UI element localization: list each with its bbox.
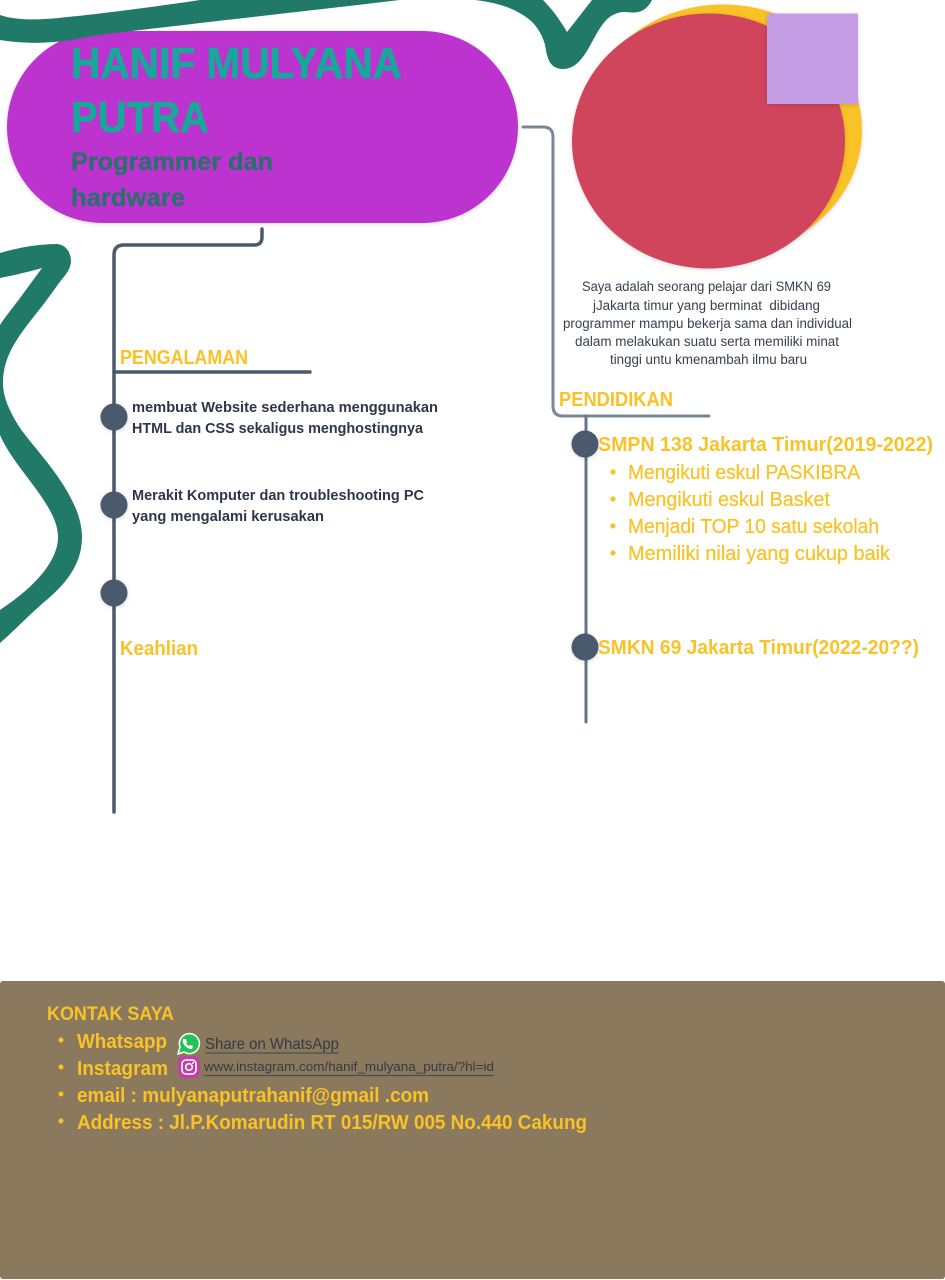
profile photo placeholder — [572, 4, 862, 268]
job title: hardware — [71, 184, 185, 212]
activities list: Mengikuti eskul PASKIBRA — [628, 462, 861, 484]
experience timeline dots — [100, 404, 128, 606]
education entry: SMKN 69: SMKN 69 Jakarta Timur(2022-20??) — [598, 637, 919, 659]
contact: address: Address : Jl.P.Komarudin RT 015/RW 005 No.440 Cakung — [77, 1112, 587, 1134]
contact heading: KONTAK SAYA — [47, 1004, 174, 1025]
experience item: website — [132, 399, 438, 437]
heading: skills: Keahlian — [120, 638, 198, 660]
experience item: website: HTML dan CSS sekaligus menghostingnya — [132, 420, 424, 437]
header pill — [7, 31, 518, 223]
job title — [71, 148, 273, 212]
contact: email: email : mulyanaputrahanif@gmail .com — [77, 1085, 429, 1107]
about me text — [563, 279, 852, 367]
education entry: SMPN 138 — [598, 434, 933, 565]
activities list — [610, 462, 891, 565]
decorative green squiggle: left — [0, 244, 82, 643]
contact: whatsapp — [58, 1031, 339, 1054]
whatsapp link: Share on WhatsApp — [205, 1036, 339, 1053]
decorative green squiggle: top — [0, 0, 652, 69]
education entry: SMPN 138: SMPN 138 Jakarta Timur(2019-2022) — [598, 434, 933, 456]
job title: Programmer dan — [71, 148, 273, 176]
connector: pill to education — [523, 127, 709, 416]
heading: experience: PENGALAMAN — [120, 347, 248, 369]
experience item: computer: Merakit Komputer dan troubleshooting PC — [132, 487, 424, 504]
icon: instagram — [178, 1056, 200, 1078]
icon: whatsapp — [178, 1034, 199, 1054]
about me text: Saya adalah seorang pelajar dari SMKN 69 — [582, 279, 831, 294]
experience item: website: membuat Website sederhana menggunakan — [132, 399, 438, 416]
heading: education: PENDIDIKAN — [559, 389, 673, 411]
education timeline line — [584, 416, 588, 722]
about me text: programmer mampu bekerja sama dan individual — [563, 316, 852, 331]
connector: experience timeline — [114, 229, 310, 812]
education timeline dots — [572, 430, 598, 660]
experience item: computer: yang mengalami kerusakan — [132, 508, 324, 525]
contact: instagram: Instagram — [77, 1058, 168, 1080]
name — [71, 39, 402, 142]
activities list: Memiliki nilai yang cukup baik — [628, 543, 891, 565]
activities list: Mengikuti eskul Basket — [628, 489, 830, 511]
contact: instagram — [58, 1056, 494, 1080]
contact: whatsapp: Whatsapp — [77, 1031, 167, 1053]
footer panel: contact — [0, 981, 945, 1279]
about me text: tinggi untu kmenambah ilmu baru — [610, 352, 807, 367]
name: HANIF MULYANA — [71, 39, 402, 88]
name: PUTRA — [71, 93, 209, 142]
instagram link: www.instagram.com/hanif_mulyana_putra/?hl=id — [203, 1059, 494, 1074]
about me text: jJakarta timur yang berminat dibidang — [592, 298, 820, 313]
experience item: computer — [132, 487, 424, 525]
activities list: Menjadi TOP 10 satu sekolah — [628, 516, 879, 538]
about me text: dalam melakukan suatu serta memiliki minat — [575, 334, 839, 349]
